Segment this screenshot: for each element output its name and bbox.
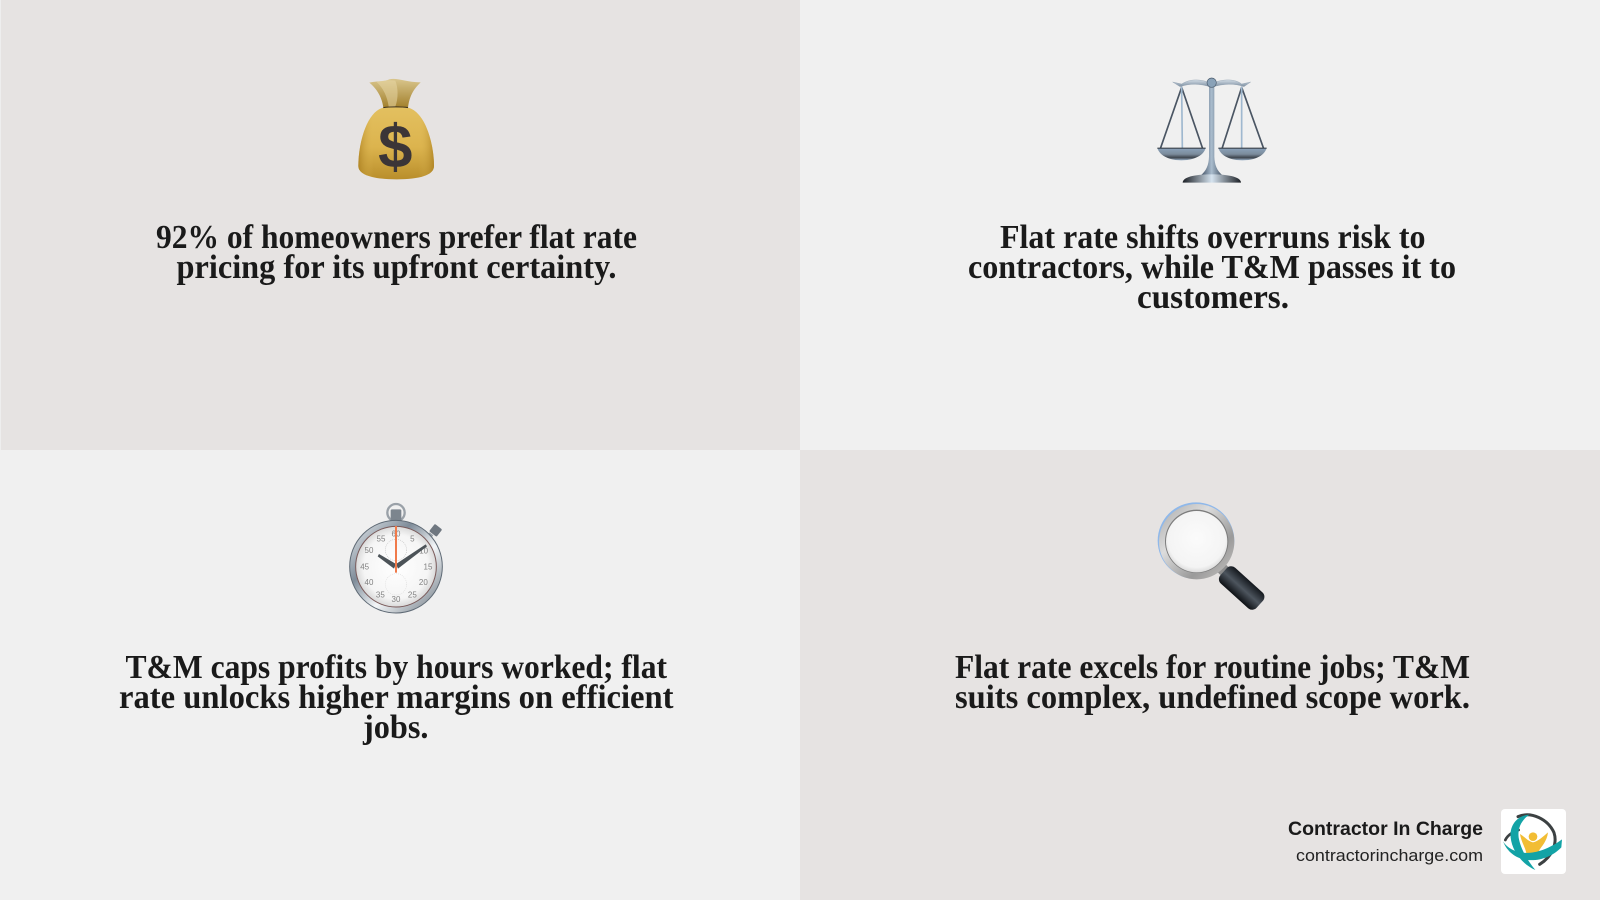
- icon: stopwatch: 35: [376, 590, 385, 599]
- icon: stopwatch: [350, 504, 442, 613]
- text: profit statement: T&M caps profits by hours worked; flat: [126, 649, 668, 686]
- icon: balance scales: [1157, 78, 1267, 183]
- logo: [1501, 809, 1566, 874]
- icon: stopwatch: 40: [365, 578, 374, 587]
- icon: stopwatch: 20: [419, 578, 428, 587]
- text: overrun risk statement: [968, 219, 1456, 316]
- text: homeowners statement: [156, 219, 637, 286]
- text: job fit statement: Flat rate excels for routine jobs; T&M: [955, 649, 1470, 686]
- panel: homeowners prefer flat rate: [0, 0, 800, 450]
- text: job fit statement: [955, 649, 1470, 716]
- text: homeowners statement: 92% of homeowners prefer flat rate: [156, 219, 637, 256]
- icon: stopwatch: 60: [392, 530, 401, 539]
- panel: profit caps: [0, 450, 800, 900]
- text: overrun risk statement: customers.: [1137, 279, 1289, 316]
- icon: stopwatch: 5: [410, 534, 415, 543]
- icon: stopwatch: 15: [424, 563, 433, 572]
- icon: stopwatch: 50: [365, 546, 374, 555]
- text: overrun risk statement: contractors, while T&M passes it to: [968, 249, 1456, 286]
- icon: stopwatch: 25: [408, 590, 417, 599]
- brand name: Contractor In Charge: [1288, 819, 1483, 840]
- icon: money bag: [358, 79, 434, 181]
- text: profit statement: rate unlocks higher margins on efficient: [119, 679, 674, 716]
- icon: magnifying glass: [1158, 502, 1267, 612]
- icon: stopwatch: 55: [377, 534, 386, 543]
- panel: job fit: [800, 450, 1600, 900]
- icon: money bag: $: [378, 112, 412, 181]
- text: homeowners statement: pricing for its upfront certainty.: [176, 249, 616, 286]
- text: job fit statement: suits complex, undefined scope work.: [955, 679, 1470, 716]
- text: profit statement: jobs.: [362, 709, 428, 746]
- panel: overrun risk: [800, 0, 1600, 450]
- text: profit statement: [119, 649, 674, 746]
- text: overrun risk statement: Flat rate shifts overruns risk to: [1000, 219, 1426, 256]
- icon: stopwatch: 45: [360, 563, 370, 572]
- brand url: contractorincharge.com: [1296, 846, 1483, 865]
- icon: stopwatch: 10: [419, 546, 429, 555]
- brand block: [1288, 809, 1566, 874]
- icon: stopwatch: 30: [392, 595, 401, 604]
